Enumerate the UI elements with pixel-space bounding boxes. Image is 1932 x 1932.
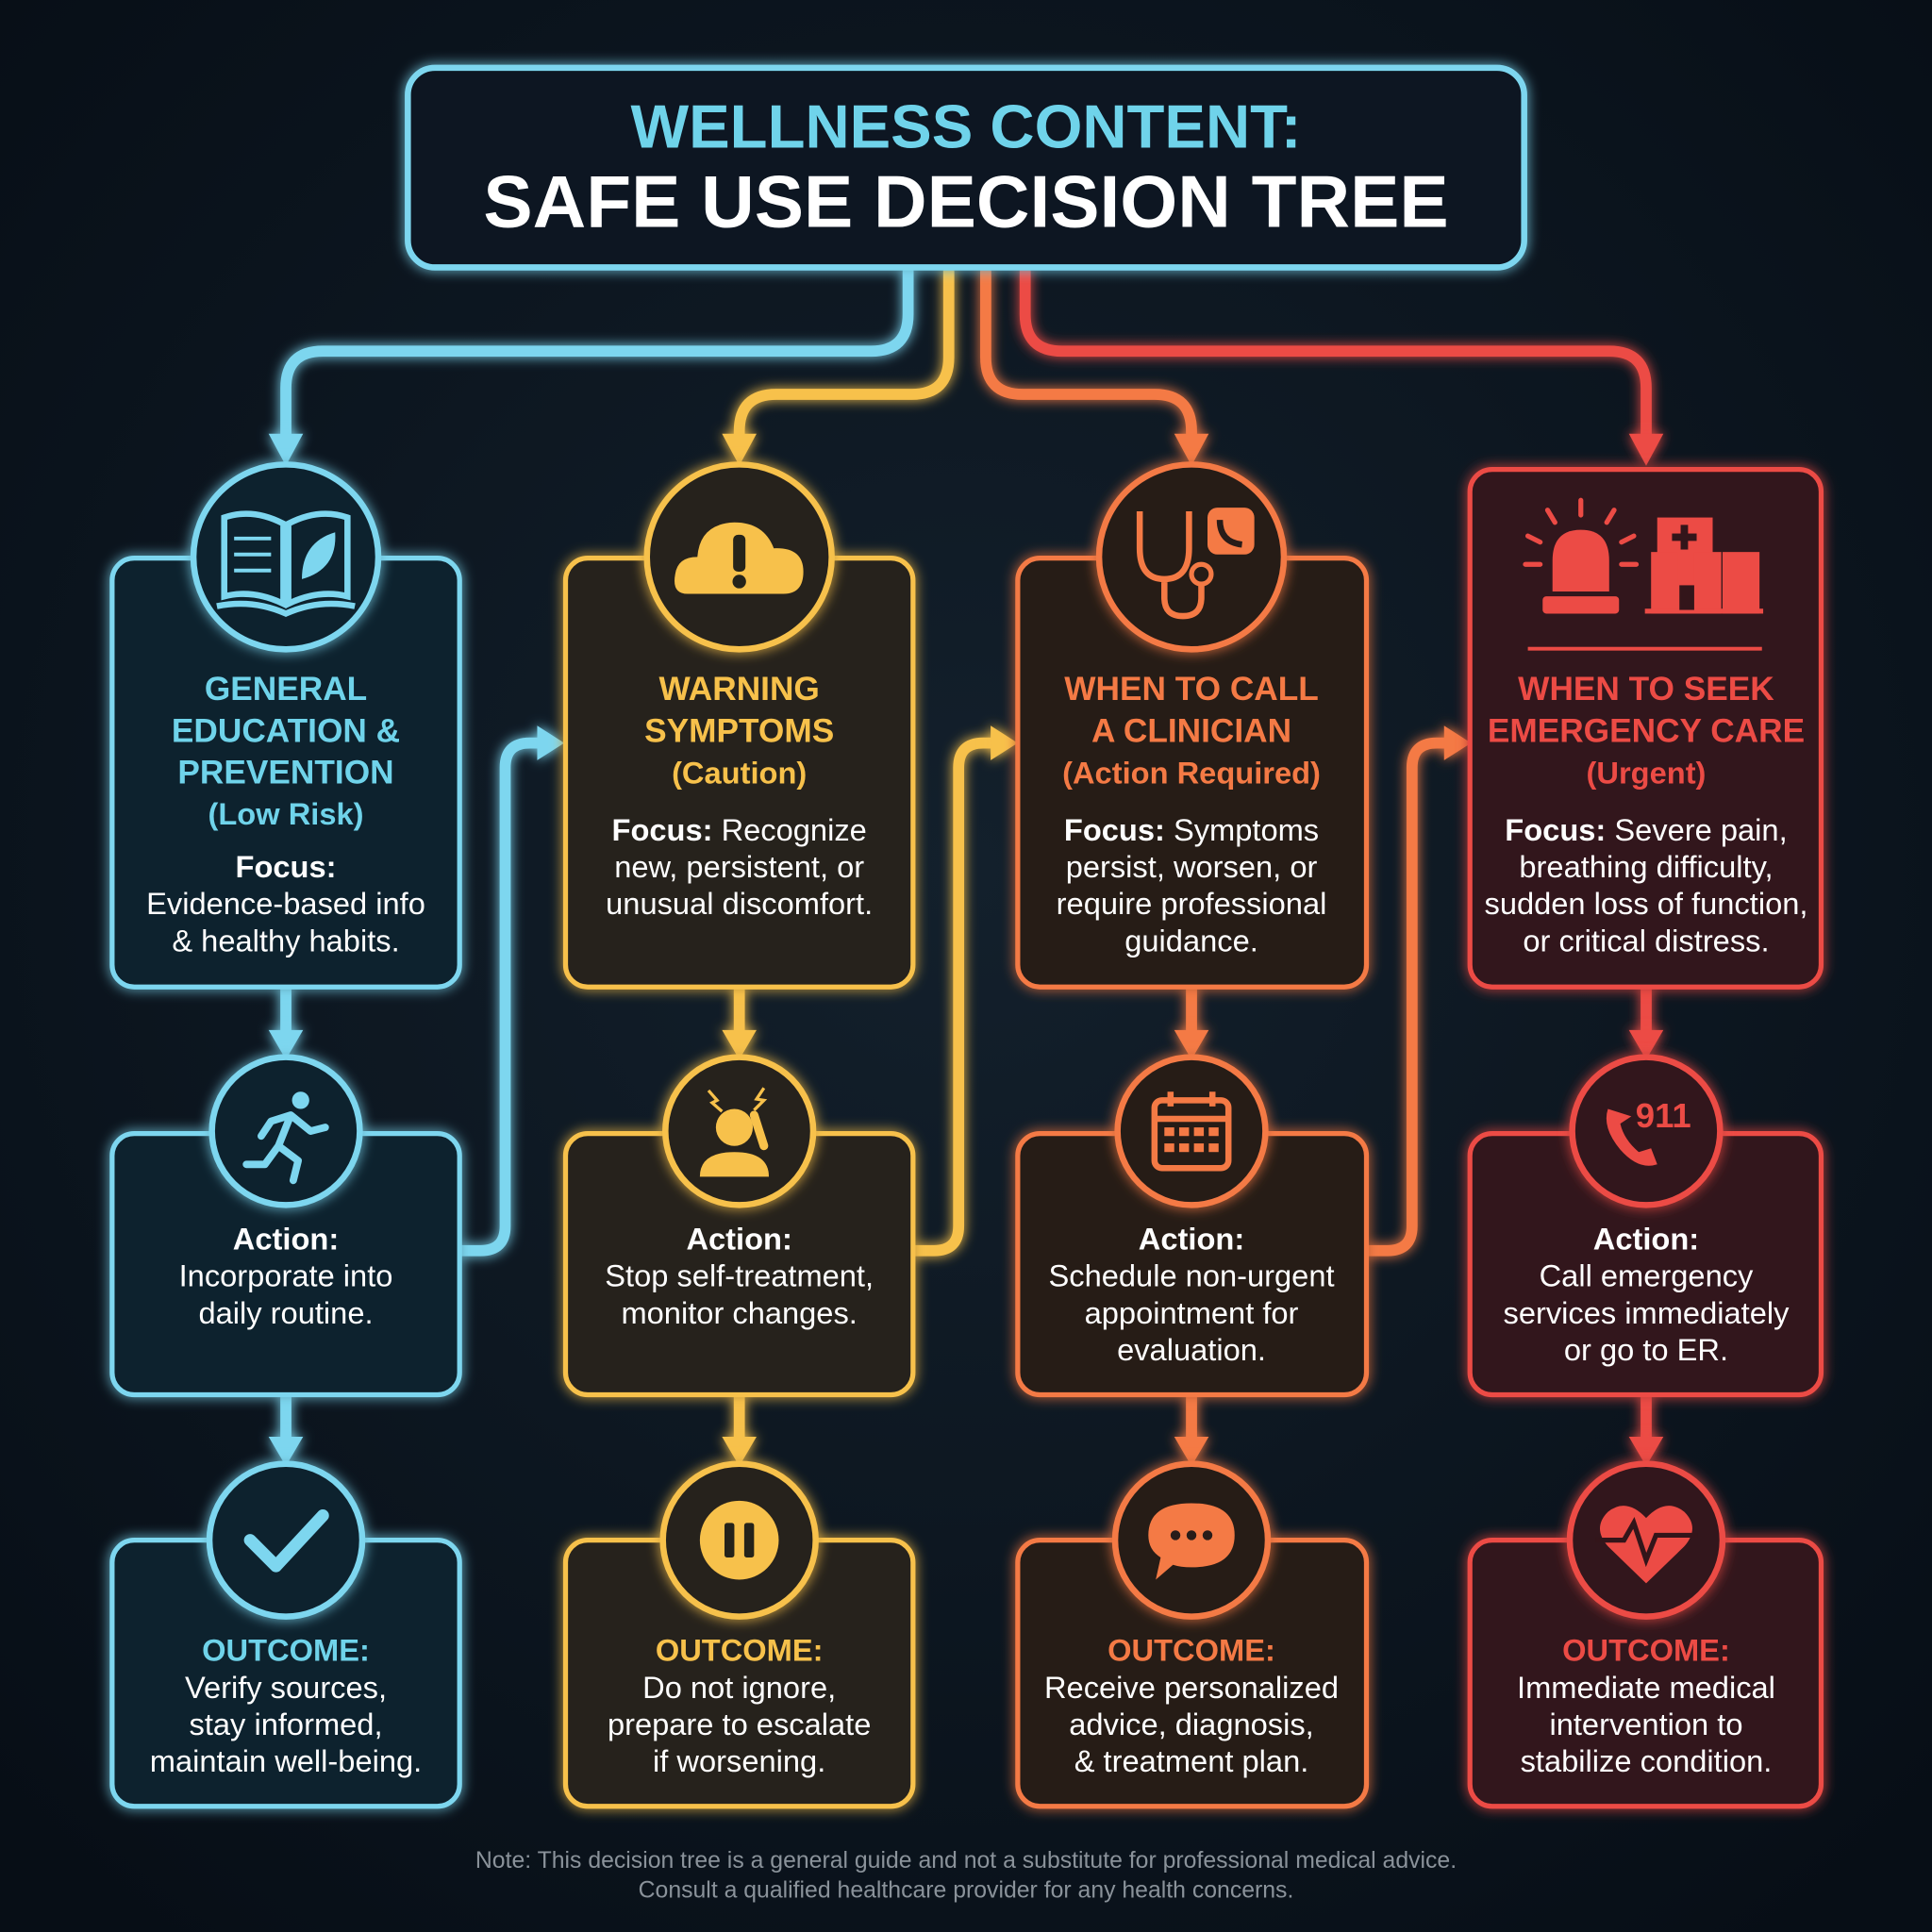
footnote: Consult a qualified healthcare provider for any health concerns. <box>639 1877 1293 1903</box>
icon: headache person <box>665 1058 813 1205</box>
panel: emergency care: (Urgent) <box>1587 756 1706 791</box>
panel: outcome orange: Receive personalized <box>1044 1670 1339 1705</box>
panel: outcome orange: OUTCOME: <box>1108 1633 1275 1668</box>
icon: runner <box>212 1058 359 1205</box>
panel: outcome orange: advice, diagnosis, <box>1069 1707 1314 1741</box>
panel: emergency care: Focus: Severe pain, <box>1505 812 1788 847</box>
icon: pause <box>663 1464 816 1617</box>
panel: action yellow: Stop self-treatment, <box>605 1258 874 1293</box>
panel: action orange: evaluation. <box>1117 1332 1266 1367</box>
panel: general education: Focus: <box>236 849 337 884</box>
panel: when to call a clinician: WHEN TO CALL <box>1064 671 1319 708</box>
panel: general education: (Low Risk) <box>208 796 364 831</box>
panel: outcome yellow: Do not ignore, <box>642 1670 836 1705</box>
panel: outcome cyan <box>112 1464 459 1807</box>
panel: action red: or go to ER. <box>1564 1332 1728 1367</box>
panel: general education: GENERAL <box>205 671 367 708</box>
footnote: Note: This decision tree is a general guide and not a substitute for professional medical advice. <box>475 1848 1457 1874</box>
panel: warning symptoms <box>566 464 913 987</box>
panel: action orange: Schedule non-urgent <box>1048 1258 1335 1293</box>
panel: action cyan: Incorporate into <box>179 1258 392 1293</box>
arrowheads <box>269 434 1663 1466</box>
panel: outcome yellow: if worsening. <box>653 1743 825 1778</box>
panel: outcome red: intervention to <box>1549 1707 1743 1741</box>
panel: action red <box>1470 1058 1821 1395</box>
panel: general education: EDUCATION & <box>172 712 400 749</box>
panel: general education: PREVENTION <box>177 755 394 791</box>
title <box>408 68 1524 267</box>
panel: action yellow: Action: <box>686 1221 792 1256</box>
icon: book <box>193 464 378 649</box>
icon: siren and hospital <box>1525 500 1763 651</box>
title: SAFE USE DECISION TREE <box>483 159 1449 242</box>
panel: warning symptoms: Focus: Recognize <box>612 812 867 847</box>
icon: 911 phone <box>1573 1058 1720 1205</box>
panel: outcome cyan: maintain well-being. <box>150 1743 422 1778</box>
panel: emergency care: WHEN TO SEEK <box>1518 671 1774 708</box>
panel: action yellow: monitor changes. <box>621 1295 858 1330</box>
panel: warning symptoms: WARNING <box>658 671 820 708</box>
panel: outcome orange <box>1018 1464 1366 1807</box>
panel: outcome cyan: stay informed, <box>190 1707 383 1741</box>
panel: general education <box>112 464 459 987</box>
panel: emergency care: sudden loss of function, <box>1485 886 1807 921</box>
icon: checkmark <box>209 1464 362 1617</box>
panel: warning symptoms: unusual discomfort. <box>606 886 873 921</box>
panel: action orange: Action: <box>1139 1221 1244 1256</box>
title: WELLNESS CONTENT: <box>630 92 1302 161</box>
panel: action red: Call emergency <box>1540 1258 1754 1293</box>
panel: action cyan <box>112 1058 459 1395</box>
panel: outcome red: OUTCOME: <box>1562 1633 1730 1668</box>
panel: when to call a clinician: Focus: Symptoms <box>1064 812 1319 847</box>
panel: action red: Action: <box>1593 1221 1699 1256</box>
panel: when to call a clinician <box>1018 464 1366 987</box>
panel: action red: services immediately <box>1504 1295 1790 1330</box>
connectors: tree lines from title <box>286 271 1646 1441</box>
panel: action cyan: daily routine. <box>198 1295 374 1330</box>
panel: warning symptoms: SYMPTOMS <box>644 712 834 749</box>
panel: when to call a clinician: require professional <box>1057 886 1326 921</box>
panel: outcome red <box>1470 1464 1821 1807</box>
icon: chat bubble <box>1115 1464 1268 1617</box>
panel: outcome cyan: Verify sources, <box>185 1670 387 1705</box>
icon: heart pulse <box>1570 1464 1723 1617</box>
panel: outcome orange: & treatment plan. <box>1074 1743 1308 1778</box>
panel: outcome red: stabilize condition. <box>1521 1743 1772 1778</box>
panel: general education: Evidence-based info <box>146 886 425 921</box>
icon: calendar <box>1118 1058 1265 1205</box>
panel: general education: & healthy habits. <box>172 923 400 958</box>
panel: when to call a clinician: guidance. <box>1124 923 1258 958</box>
panel: warning symptoms: new, persistent, or <box>614 849 864 884</box>
panel: emergency care: EMERGENCY CARE <box>1488 712 1805 749</box>
icon: 911 phone: 911 <box>1636 1096 1691 1135</box>
panel: when to call a clinician: A CLINICIAN <box>1091 712 1291 749</box>
panel: emergency care: or critical distress. <box>1523 923 1770 958</box>
panel: emergency care <box>1470 470 1821 987</box>
panel: outcome cyan: OUTCOME: <box>202 1633 370 1668</box>
icon: stethoscope and phone <box>1099 464 1284 649</box>
panel: when to call a clinician: persist, worsen, or <box>1066 849 1317 884</box>
panel: outcome yellow: prepare to escalate <box>608 1707 871 1741</box>
panel: outcome yellow <box>566 1464 913 1807</box>
panel: action yellow <box>566 1058 913 1395</box>
icon: warning cloud <box>647 464 832 649</box>
panel: emergency care: breathing difficulty, <box>1519 849 1774 884</box>
panel: outcome red: Immediate medical <box>1517 1670 1775 1705</box>
panel: action orange: appointment for <box>1085 1295 1299 1330</box>
panel: outcome yellow: OUTCOME: <box>656 1633 824 1668</box>
panel: action cyan: Action: <box>233 1221 339 1256</box>
panel: action orange <box>1018 1058 1366 1395</box>
panel: when to call a clinician: (Action Required) <box>1062 756 1321 791</box>
panel: warning symptoms: (Caution) <box>672 756 807 791</box>
